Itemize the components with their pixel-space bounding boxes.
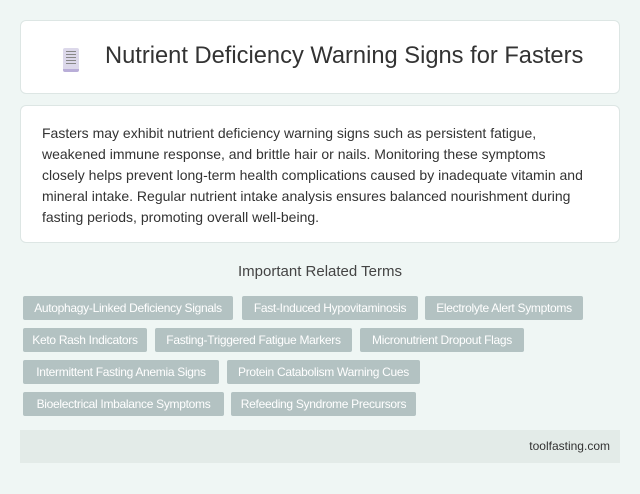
tags: Intermittent Fasting Anemia Signs: [36, 365, 206, 379]
description text: Fasters may exhibit nutrient deficiency warning signs such as persistent fatigue,: [42, 125, 536, 141]
description text: [42, 125, 583, 225]
title: Nutrient Deficiency Warning Signs for Fasters: [105, 43, 583, 69]
tags: Autophagy-Linked Deficiency Signals: [34, 301, 222, 315]
tags: Keto Rash Indicators: [32, 333, 138, 347]
description text: fasting periods, promoting overall well-being.: [42, 209, 319, 225]
tags: Refeeding Syndrome Precursors: [241, 397, 406, 411]
tags: Electrolyte Alert Symptoms: [436, 301, 572, 315]
tags: Fasting-Triggered Fatigue Markers: [166, 333, 341, 347]
section heading: Important Related Terms: [238, 263, 402, 280]
tags: Protein Catabolism Warning Cues: [238, 365, 409, 379]
icon: document: [63, 48, 79, 72]
description text: closely helps prevent long-term health complications caused by inadequate vitamin and: [42, 167, 583, 183]
description text: mineral intake. Regular nutrient intake analysis ensures balanced nourishment during: [42, 188, 570, 204]
tags: Micronutrient Dropout Flags: [372, 333, 512, 347]
footer: [20, 430, 620, 463]
footer source text: toolfasting.com: [529, 439, 610, 453]
header card: [20, 20, 620, 94]
description card: [20, 105, 620, 243]
description text: weakened immune response, and brittle hair or nails. Monitoring these symptoms: [42, 146, 545, 162]
tags: Bioelectrical Imbalance Symptoms: [37, 397, 210, 411]
tags: Fast-Induced Hypovitaminosis: [254, 301, 406, 315]
